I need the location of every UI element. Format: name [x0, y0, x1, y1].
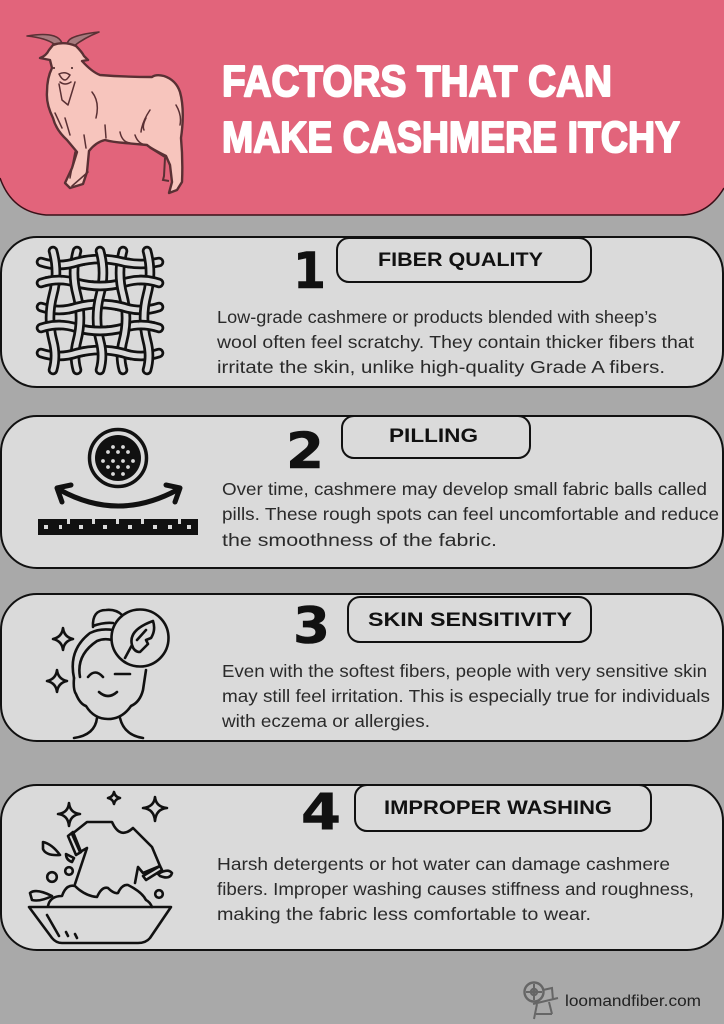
header banner [0, 0, 724, 215]
footer logo: loomandfiber.com [565, 993, 701, 1010]
number: 4 [301, 783, 341, 841]
text block: fibers. Improper washing causes stiffness and roughness, [217, 879, 694, 899]
text block: Over time, cashmere may develop small fabric balls called [222, 479, 707, 499]
panel: pilling [1, 416, 723, 568]
icon: spinning wheel [524, 982, 558, 1019]
text block: pills. These rough spots can feel uncomfortable and reduce [222, 504, 719, 524]
text block: the smoothness of the fabric. [222, 530, 497, 550]
icon: woven fabric [41, 251, 159, 370]
text block: irritate the skin, unlike high-quality Grade A fibers. [217, 357, 665, 377]
panel: fiber quality [1, 237, 723, 387]
label: skin sensitivity [348, 597, 591, 642]
label: pilling [342, 416, 530, 458]
text block: making the fabric less comfortable to wear. [217, 904, 591, 924]
label: fiber quality: FIBER QUALITY [378, 250, 543, 271]
text block [216, 307, 694, 377]
icon: goat [27, 32, 183, 193]
number: 3 [293, 597, 330, 655]
label: improper washing [355, 785, 651, 831]
text block: wool often feel scratchy. They contain thicker fibers that [216, 332, 694, 352]
title: FACTORS THAT CAN [222, 57, 612, 106]
text block [217, 854, 694, 924]
panel: improper washing [1, 783, 723, 950]
title [222, 57, 680, 162]
text block [222, 479, 719, 550]
text block: Even with the softest fibers, people with very sensitive skin [222, 661, 707, 681]
text block [221, 661, 710, 731]
icon: face with feather [47, 610, 168, 738]
footer logo [524, 982, 701, 1019]
text block: Harsh detergents or hot water can damage cashmere [217, 854, 670, 874]
text block: may still feel irritation. This is especially true for individuals [222, 686, 710, 706]
text block: Low-grade cashmere or products blended with sheep’s [217, 307, 657, 327]
label: improper washing: IMPROPER WASHING [384, 798, 612, 819]
panel: skin sensitivity [1, 594, 723, 741]
number: 1 [293, 242, 326, 300]
label: skin sensitivity: SKIN SENSITIVITY [368, 610, 572, 631]
number: 2 [286, 422, 324, 480]
label: fiber quality [337, 238, 591, 282]
icon: washing basin [29, 792, 172, 943]
label: pilling: PILLING [389, 426, 478, 447]
icon: pill on fabric [38, 430, 198, 535]
text block: with eczema or allergies. [221, 711, 430, 731]
